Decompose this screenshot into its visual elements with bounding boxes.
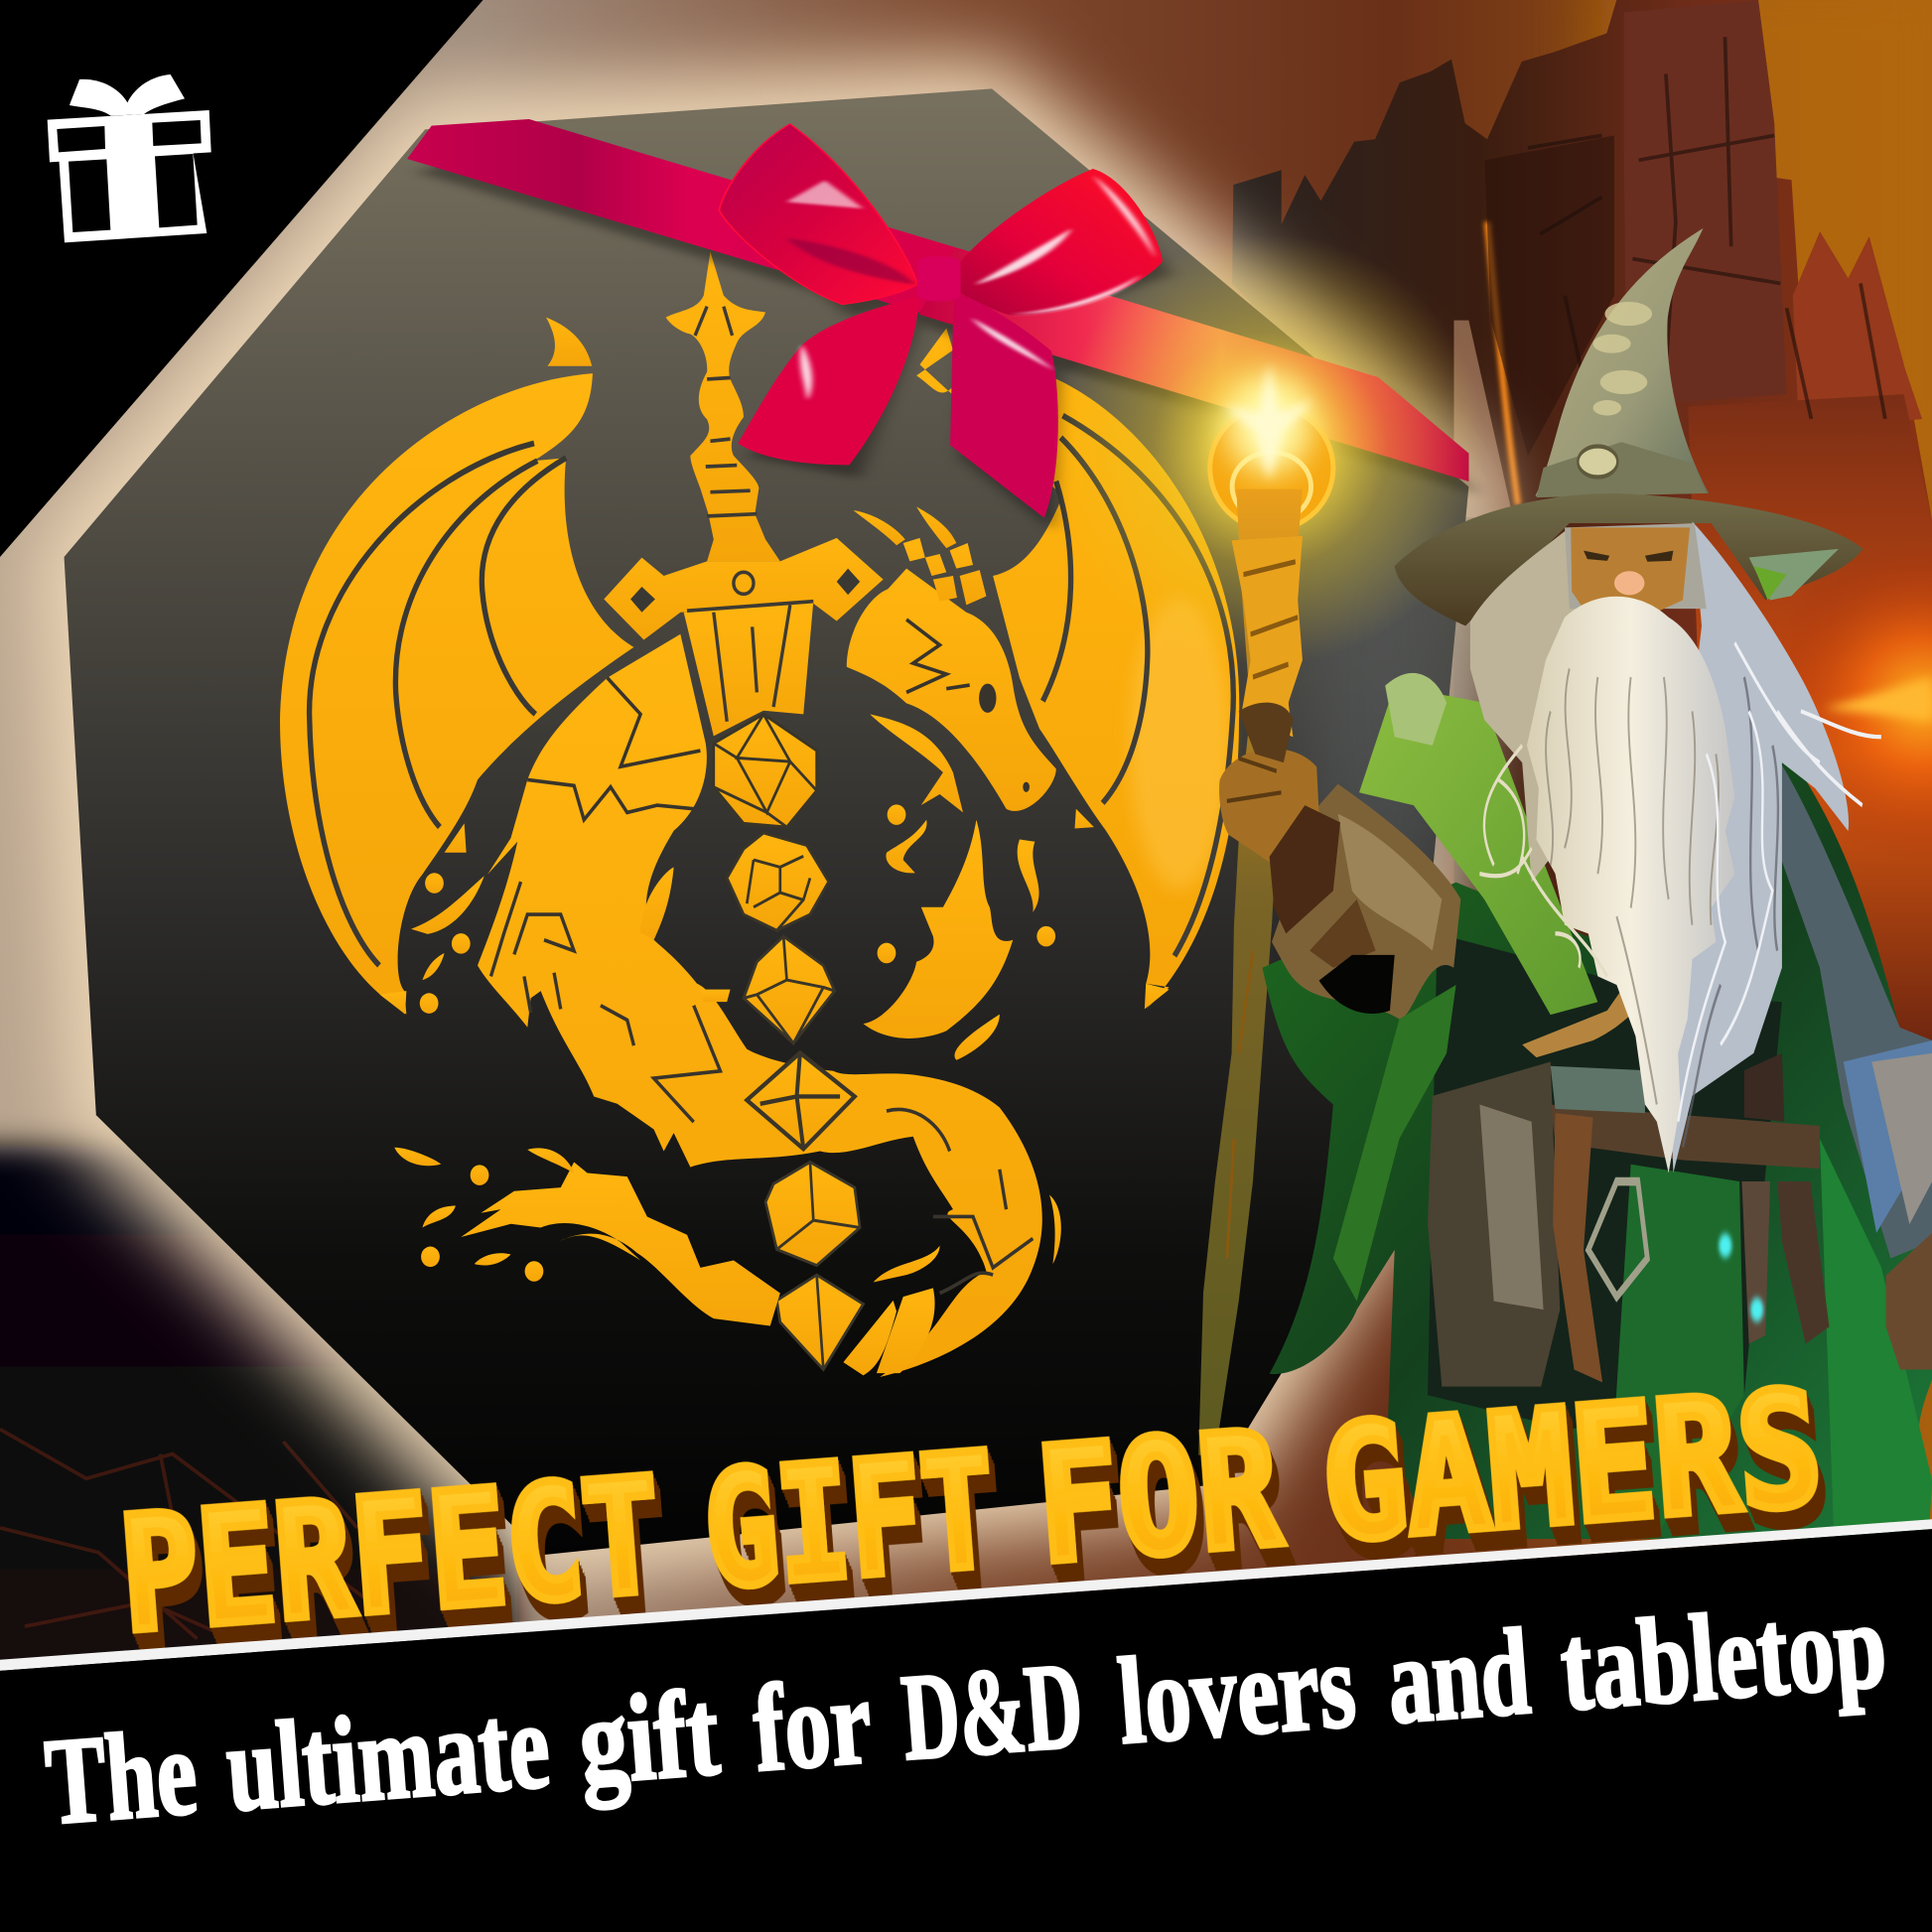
green cape xyxy=(1359,686,1597,1015)
d12 die xyxy=(727,833,829,930)
ribbon shadow xyxy=(417,132,1478,531)
robe dark centre xyxy=(1428,933,1782,1430)
dragon head and horns xyxy=(847,506,1056,812)
beard xyxy=(1527,597,1734,1173)
title banner text xyxy=(115,1357,1828,1668)
d6 die xyxy=(765,1162,860,1266)
bow left loop xyxy=(719,124,917,305)
subtitle: The xyxy=(41,1703,202,1851)
dragon sword and dice emblem xyxy=(280,252,1239,1377)
fist xyxy=(1219,749,1319,874)
white divider strip xyxy=(0,1519,1932,1671)
gift body xyxy=(59,151,207,242)
title banner text: GIFT xyxy=(698,1420,1001,1623)
subtitle: D&D xyxy=(897,1636,1087,1786)
title banner text: PERFECT xyxy=(115,1445,666,1668)
blue right sleeve xyxy=(1775,754,1932,1259)
subtitle: gift xyxy=(574,1663,724,1811)
top-left black corner xyxy=(0,0,483,557)
icon: gift box xyxy=(48,74,211,242)
bottom black band xyxy=(0,1529,1932,1932)
breath flames xyxy=(864,804,1055,1060)
castle rock tower xyxy=(1232,0,1932,1232)
subtitle: ultimate xyxy=(221,1676,554,1837)
magic sparks xyxy=(1719,1234,1763,1321)
hat band xyxy=(1536,442,1707,497)
subtitle: and xyxy=(1383,1602,1534,1749)
ribbon left band xyxy=(407,119,975,315)
subtitle xyxy=(41,1576,1890,1852)
red ribbon and bow xyxy=(407,119,1478,531)
dragon body xyxy=(478,634,1061,1377)
hair right xyxy=(1664,521,1849,1173)
d10 die xyxy=(747,1052,855,1149)
gift bow xyxy=(69,74,185,116)
hat brim xyxy=(1395,493,1863,625)
wizard xyxy=(1198,228,1932,1539)
bow right loop xyxy=(957,169,1163,315)
gift lid xyxy=(48,110,211,162)
ground cracks xyxy=(0,1430,369,1651)
staff gold head xyxy=(1232,536,1303,737)
bow left tail xyxy=(738,298,919,465)
gift openings xyxy=(57,120,202,232)
face xyxy=(1571,527,1690,618)
d4 die xyxy=(776,1275,864,1370)
cream halo around octagon xyxy=(65,88,1466,1555)
bow right tail xyxy=(950,291,1058,518)
d20 die xyxy=(714,714,817,827)
d8 die xyxy=(744,936,835,1043)
belts and pouches xyxy=(1428,1061,1560,1387)
robe xyxy=(1262,746,1932,1539)
hair left xyxy=(1470,527,1584,883)
tail flames and sparks xyxy=(394,1148,780,1325)
ribbon right band xyxy=(919,248,1468,482)
right wing xyxy=(916,329,1239,1009)
hat cone xyxy=(1536,228,1709,495)
left sparks xyxy=(380,823,1170,1015)
sword xyxy=(604,252,884,736)
subtitle: for xyxy=(749,1652,876,1797)
staff glow xyxy=(1053,234,1484,665)
left wing xyxy=(280,318,633,1015)
octagon playmat xyxy=(65,88,1468,1555)
title banner text: GAMERS xyxy=(1316,1357,1828,1578)
wizard staff xyxy=(1198,489,1303,1455)
bow knot xyxy=(917,256,961,301)
bow highlights xyxy=(786,176,1156,400)
tan sleeve xyxy=(1272,784,1460,1019)
title banner text: FOR xyxy=(1032,1398,1287,1598)
subtitle: lovers xyxy=(1114,1615,1360,1769)
